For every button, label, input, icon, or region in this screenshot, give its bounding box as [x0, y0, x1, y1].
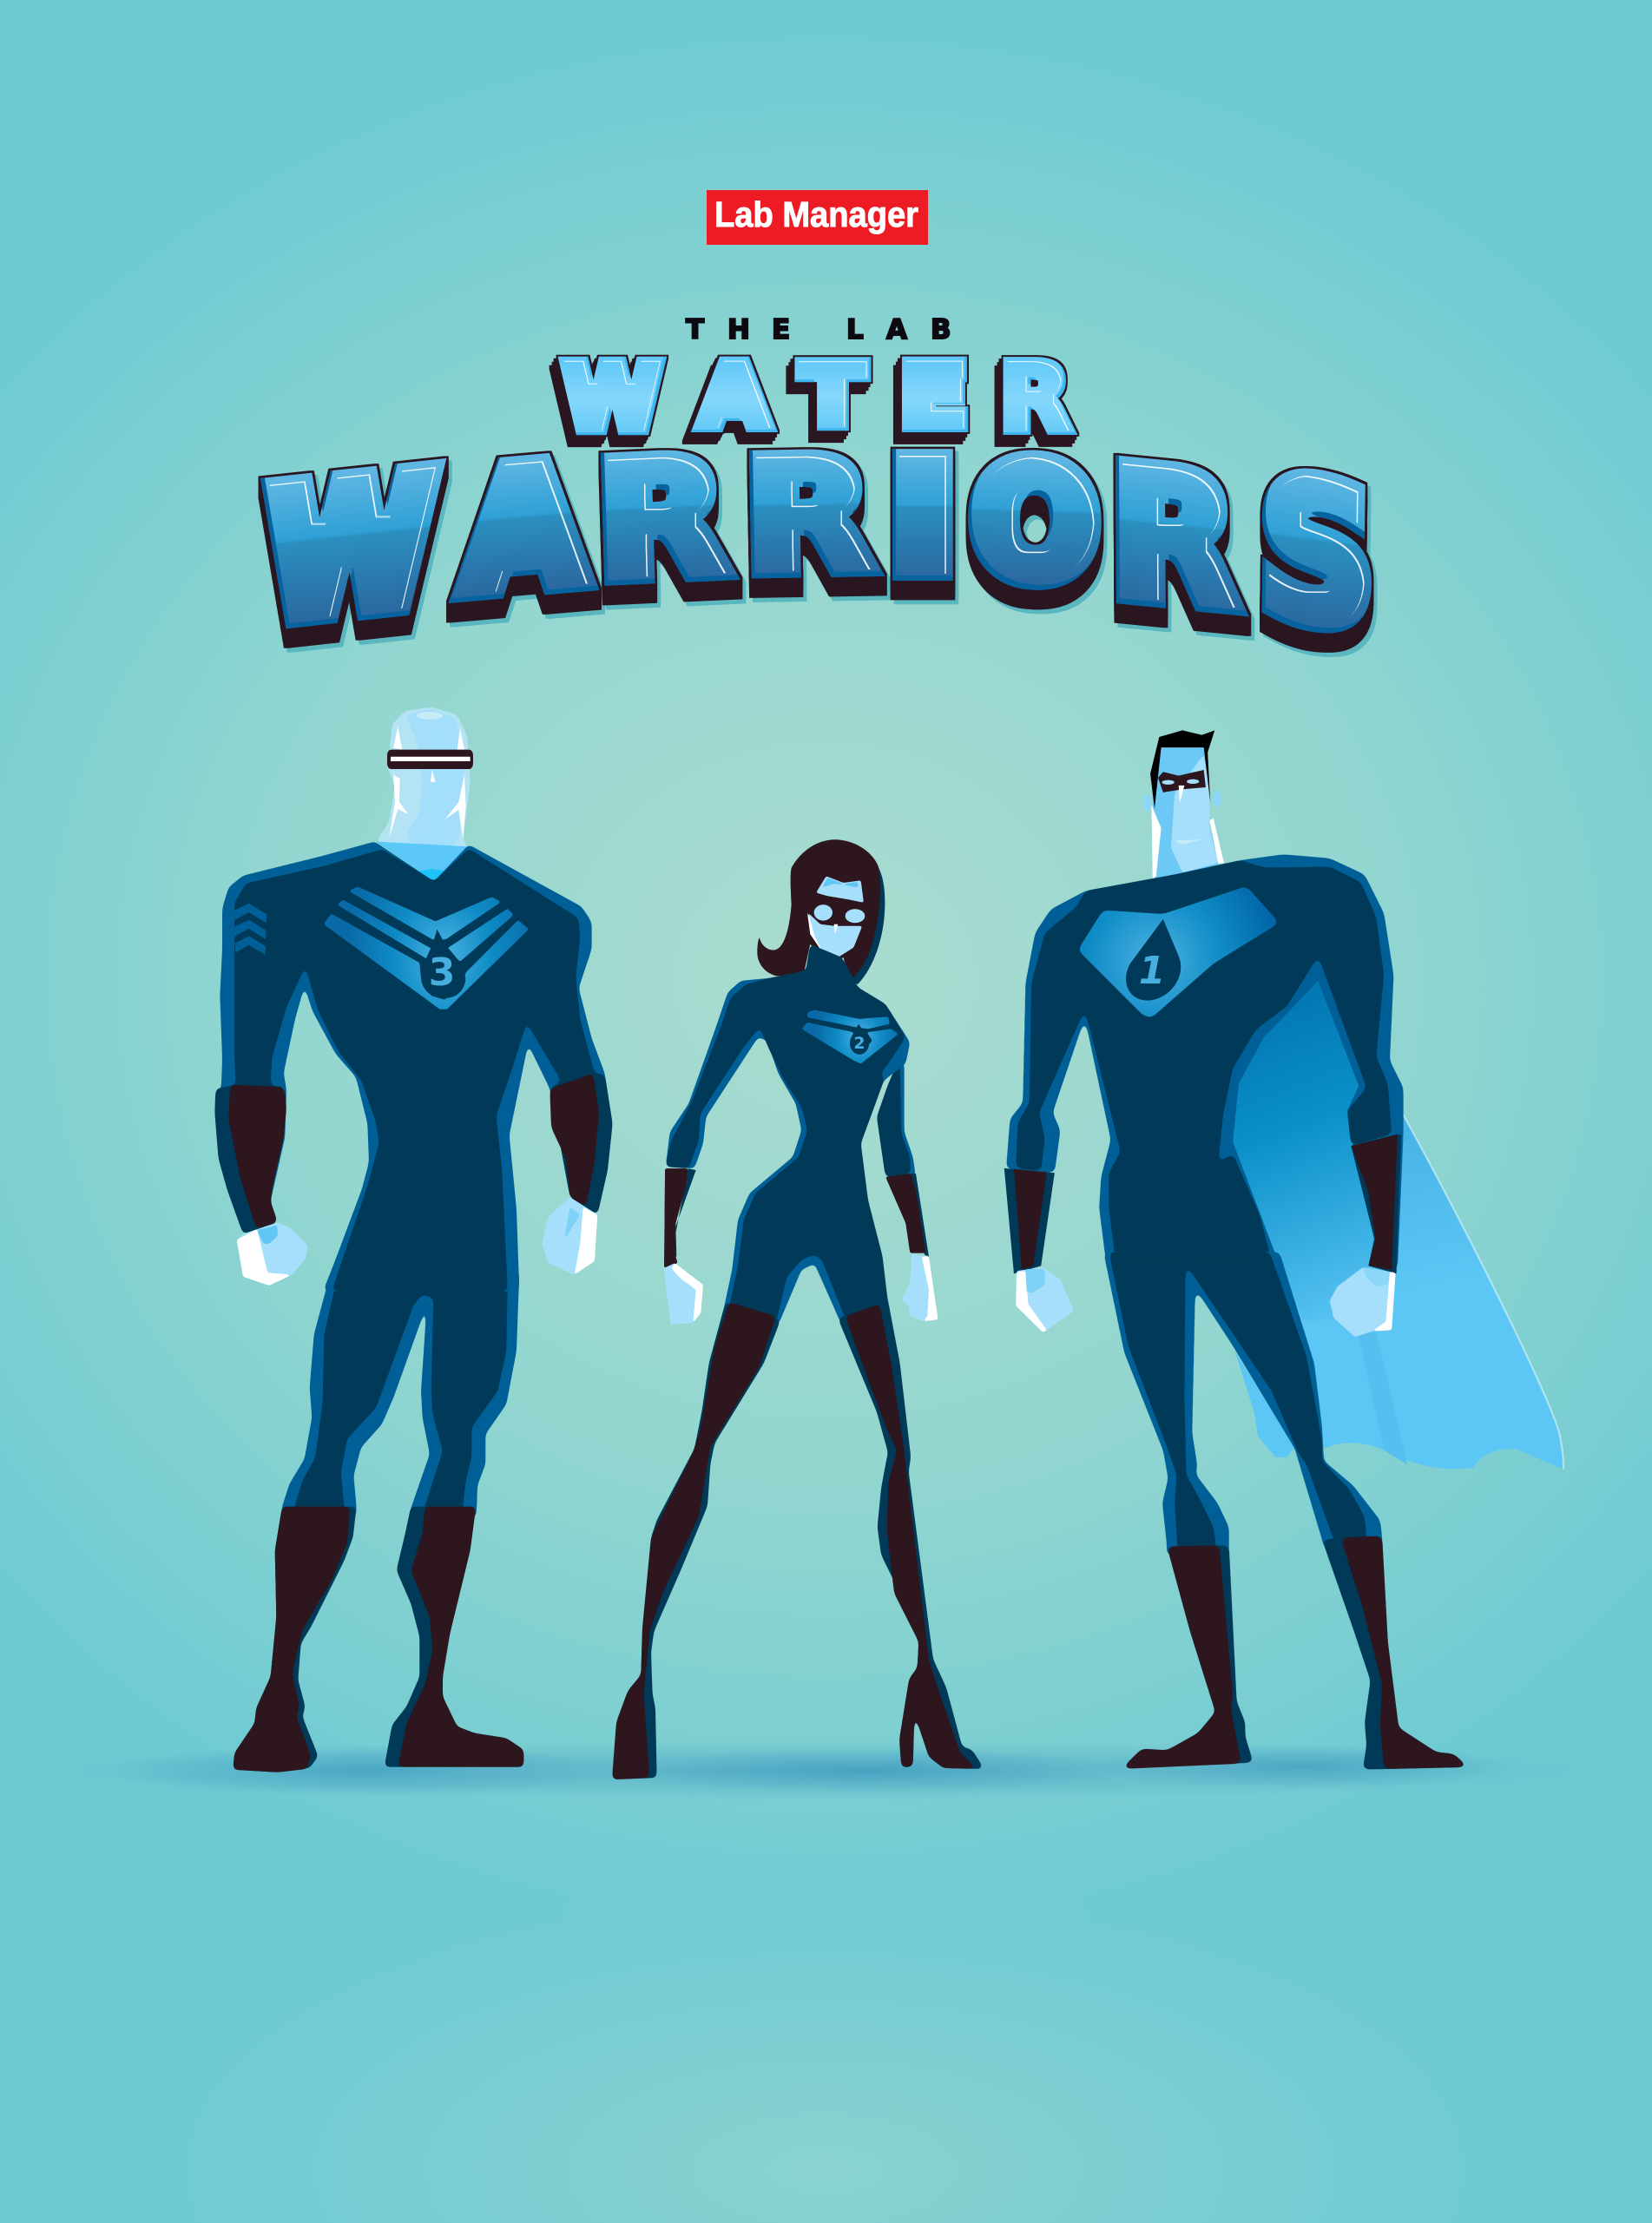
- hero 2 torso and arms: [664, 944, 938, 1325]
- hero 1 gloves: [1004, 1135, 1401, 1273]
- hero 1 chest emblem: [1078, 886, 1280, 1018]
- title: warriors: [264, 424, 1375, 671]
- hero 1 legs: [1103, 1252, 1469, 1770]
- hero 2 emblem number: 2: [853, 1034, 865, 1053]
- title: warriors: R: [1109, 429, 1238, 648]
- hero 2 gloves: [664, 1168, 929, 1268]
- title: the lab: THE LAB: [686, 314, 951, 345]
- hero 2 hands: [664, 1253, 938, 1325]
- title: water: W: [564, 346, 661, 449]
- title: water: T: [801, 346, 865, 444]
- title: warriors: A: [465, 432, 582, 628]
- hero 2 hair and face: [757, 839, 885, 984]
- title: water: [564, 344, 1071, 452]
- hero 3 head: [376, 707, 473, 881]
- hero 3 torso and arms: [214, 707, 613, 1292]
- hero 3 legs: [233, 1272, 523, 1772]
- hero 1: caped man: [1004, 730, 1563, 1770]
- hero 2: woman in mask: [612, 839, 984, 1779]
- hero 3 sleeve chevrons: [234, 904, 267, 955]
- title: warriors: S: [1259, 440, 1375, 671]
- title: warriors: R: [594, 424, 730, 615]
- floor shadow: [43, 1741, 1606, 1800]
- hero 2 legs: [612, 1302, 984, 1779]
- logo: Lab Manager: Lab Manager: [714, 194, 918, 234]
- title: water: A: [701, 348, 768, 446]
- hero 1 head: [1143, 730, 1224, 880]
- hero 1 torso and arms: [1006, 854, 1404, 1320]
- title: water: R: [1000, 344, 1071, 452]
- hero 3: bald with visor: [214, 707, 613, 1772]
- logo: Lab Manager: [707, 190, 928, 245]
- hero 3 gloves: [228, 1073, 599, 1228]
- hero 1 cape: [1234, 1115, 1563, 1470]
- hero 3 chest emblem: [324, 886, 529, 1010]
- title: warriors: O: [972, 432, 1097, 614]
- hero 2 chest emblem: [801, 1010, 898, 1064]
- title: warriors: R: [742, 427, 874, 607]
- title: water: E: [901, 346, 967, 445]
- hero 1 emblem number: 1: [1139, 949, 1165, 993]
- hero 3 emblem number: 3: [429, 950, 455, 995]
- title: warriors: W: [264, 440, 437, 659]
- hero 3 hands: [237, 1197, 597, 1286]
- title: warriors: I: [891, 431, 955, 604]
- hero 1 hands: [1016, 1267, 1396, 1337]
